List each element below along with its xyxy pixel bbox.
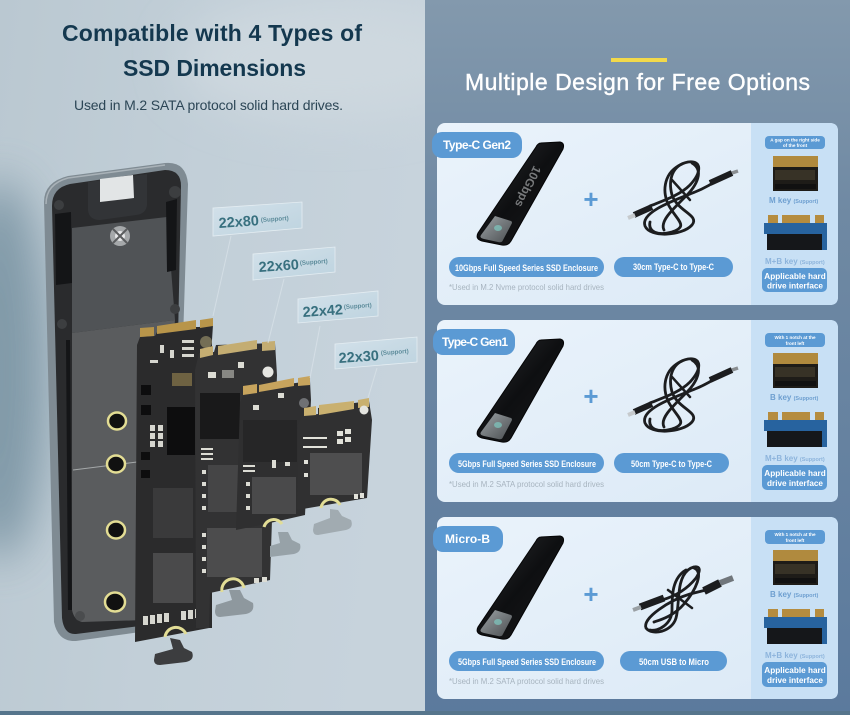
enclosure — [477, 536, 564, 639]
left title: Compatible with 4 Types of — [62, 20, 362, 46]
enclosure label — [449, 651, 604, 671]
yellow accent bar — [611, 58, 667, 62]
callout — [765, 530, 825, 544]
interface label: drive interface — [767, 676, 823, 685]
right panel background — [425, 0, 850, 715]
panel: Micro-B — [433, 517, 838, 699]
label 22x42: (Support) — [344, 302, 372, 311]
M+B label: M+B key (Support) — [765, 257, 825, 266]
enclosure label — [449, 257, 604, 277]
SSD enclosure open device — [44, 163, 188, 641]
SSD 22x42 card — [236, 376, 311, 557]
enclosure — [477, 142, 564, 245]
cable label — [614, 453, 729, 473]
tab: Micro-B — [445, 532, 490, 546]
callout: front left — [786, 341, 805, 346]
metal plate — [72, 217, 175, 333]
SSD 22x60 card — [195, 340, 277, 628]
label 22x30: 22x30 — [338, 348, 380, 367]
cable label: 30cm Type-C to Type-C — [633, 262, 714, 273]
label 22x80: (Support) — [261, 215, 289, 224]
enclosure: 10Gbps — [512, 164, 544, 210]
label 22x60: (Support) — [300, 258, 328, 267]
label 22x30 — [335, 337, 417, 369]
gold screw holes — [105, 412, 126, 612]
panel: Type-C Gen2 — [432, 123, 838, 305]
M+B key board — [764, 215, 827, 250]
callout: A gap on the right side — [770, 138, 820, 142]
clip — [154, 638, 193, 665]
interface label: drive interface — [767, 282, 823, 290]
tab — [433, 329, 515, 355]
plus: + — [583, 579, 599, 609]
label 22x30: (Support) — [381, 348, 409, 357]
lower circuit board — [72, 320, 175, 622]
enclosure label — [449, 453, 604, 473]
enclosure — [477, 339, 564, 442]
label 22x60: 22x60 — [258, 257, 300, 276]
left title line 2: SSD Dimensions — [123, 55, 306, 81]
B key label: B key (Support) — [770, 590, 818, 599]
enclosure label: 5Gbps Full Speed Series SSD Enclosure — [458, 657, 596, 668]
label 22x80: 22x80 — [218, 213, 260, 232]
label 22x42 — [298, 291, 378, 323]
M+B label: M+B key (Support) — [765, 454, 825, 463]
cable label — [620, 651, 727, 671]
callout: With 1 notch at the — [774, 335, 816, 340]
tab: Type-C Gen2 — [443, 138, 511, 152]
callout — [765, 136, 825, 149]
tab — [433, 526, 503, 552]
tab — [432, 132, 522, 158]
M key label: M key (Support) — [769, 196, 818, 205]
note: *Used in M.2 SATA protocol solid hard drives — [449, 479, 604, 489]
plus: + — [583, 381, 599, 411]
callout — [765, 333, 825, 347]
left subtitle: Used in M.2 SATA protocol solid hard drives. — [74, 97, 343, 113]
cable label: 50cm Type-C to Type-C — [631, 459, 712, 470]
bottom strip — [0, 711, 850, 715]
interface label — [762, 465, 827, 490]
mount ring — [165, 627, 186, 637]
M+B key board — [764, 412, 827, 447]
note: *Used in M.2 SATA protocol solid hard drives — [449, 676, 604, 686]
left panel background — [0, 0, 480, 715]
cable label — [614, 257, 733, 277]
B key label: B key (Support) — [770, 393, 818, 402]
right title: Multiple Design for Free Options — [465, 69, 810, 95]
callout: of the front — [783, 143, 808, 148]
interface label: drive interface — [767, 479, 823, 488]
callout: With 1 notch at the — [774, 532, 816, 537]
M key board — [773, 156, 818, 191]
enclosure label: 10Gbps Full Speed Series SSD Enclosure — [455, 263, 598, 274]
clip ghost — [215, 590, 253, 617]
cable — [628, 162, 738, 234]
interface label: Applicable hard — [764, 272, 826, 281]
B key board — [773, 550, 818, 585]
M+B key board — [764, 609, 827, 644]
cable label: 50cm USB to Micro — [639, 657, 709, 668]
note: *Used in M.2 Nvme protocol solid hard drives — [449, 282, 604, 292]
cable — [628, 359, 738, 431]
clip ghost — [270, 532, 300, 557]
tab: Type-C Gen1 — [442, 335, 508, 349]
label 22x80 — [213, 202, 302, 236]
SSD 22x30 card — [297, 398, 372, 535]
label 22x42: 22x42 — [302, 302, 344, 321]
usb cable — [633, 567, 733, 632]
B key board — [773, 353, 818, 388]
plate screw — [110, 226, 130, 246]
interface label — [762, 268, 827, 292]
label 22x60 — [253, 247, 335, 280]
SSD 22x80 card — [135, 318, 213, 665]
usb opening — [88, 174, 147, 220]
plus: + — [583, 184, 599, 214]
leader lines — [213, 236, 377, 398]
interface label: Applicable hard — [764, 666, 826, 675]
interface label: Applicable hard — [764, 469, 826, 478]
clip ghost — [313, 509, 352, 535]
M+B label: M+B key (Support) — [765, 651, 825, 660]
callout: front left — [786, 538, 805, 543]
enclosure label: 5Gbps Full Speed Series SSD Enclosure — [458, 459, 596, 470]
panel: Type-C Gen1 — [433, 320, 838, 502]
interface label — [762, 662, 827, 687]
